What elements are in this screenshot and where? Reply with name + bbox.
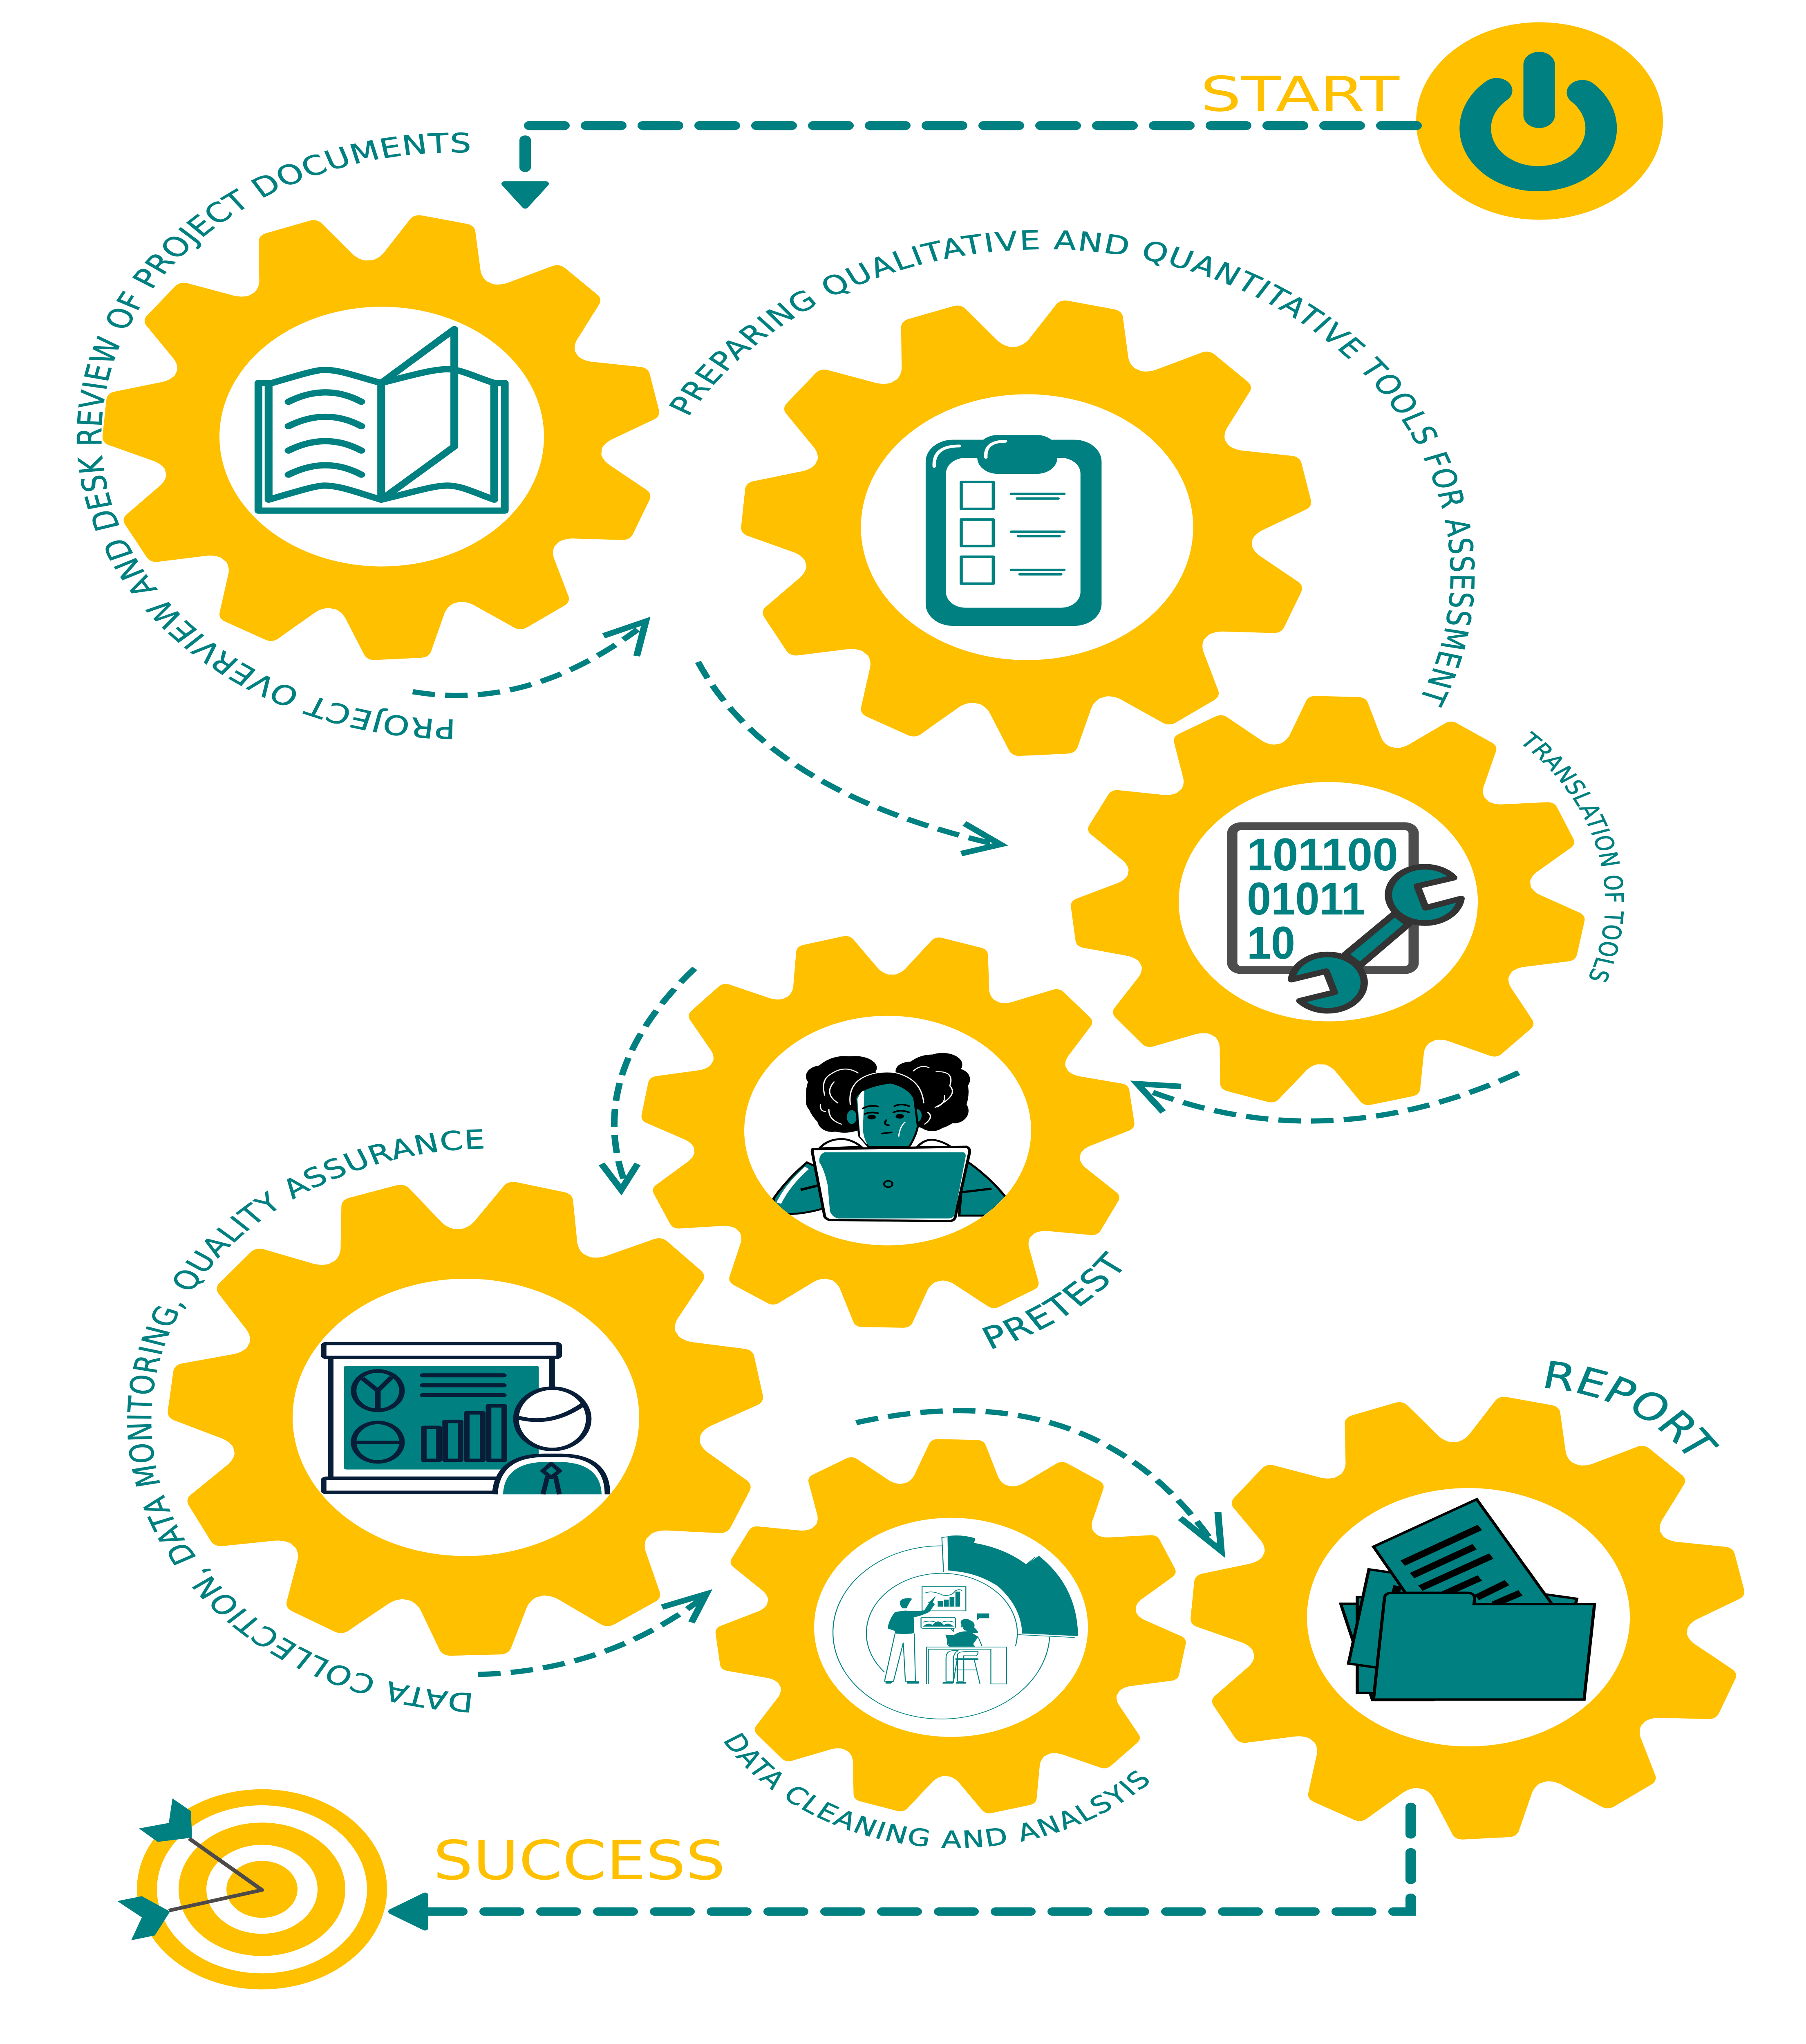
heading: start: START	[1200, 67, 1400, 122]
left arm	[774, 1163, 826, 1217]
label: data cleaning and analysis: DATA CLEANING AND ANALSYIS	[716, 1729, 1157, 1853]
heading: success: SUCCESS	[433, 1829, 725, 1892]
arrow: gear 2 to gear 3	[698, 662, 1000, 854]
gear 5	[96, 1126, 834, 1714]
label: report: REPORT	[1539, 1353, 1727, 1467]
icon: binary code sheet and wrench: 01011	[1247, 873, 1365, 925]
icon: power symbol	[1475, 65, 1601, 179]
gear 4	[573, 882, 1201, 1383]
icon: open book	[258, 329, 505, 511]
gear 3	[1057, 689, 1599, 1118]
arrow: gear 3 to gear 4	[1137, 1073, 1519, 1121]
laptop	[812, 1147, 970, 1221]
panel: step 2 preparing tools	[662, 225, 1481, 807]
icon: binary code sheet and wrench: 101100	[1247, 829, 1398, 881]
icon: person with laptop	[774, 1053, 1006, 1221]
icon: binary code sheet and wrench	[1232, 826, 1461, 1011]
start circle	[1416, 22, 1663, 220]
panel: step 3 translation	[1057, 689, 1629, 1118]
icon: target with arrows	[117, 1789, 387, 1989]
icon: analysts with dashboard ring	[833, 1535, 1078, 1719]
label: data collection: DATA COLLECTION, DATA MONITORING, QUALITY ASSURANCE	[121, 1125, 486, 1717]
panel: start	[1200, 22, 1663, 220]
panel: step 5 data collection	[96, 1125, 834, 1717]
gear 2	[678, 253, 1375, 807]
shoulders	[819, 1139, 861, 1148]
label: translation of tools: TRANSLATION OF TOOLS	[1514, 728, 1629, 985]
arrow: gear 6 to gear 7	[856, 1411, 1221, 1551]
panel: step 4 pretest	[642, 936, 1135, 1349]
face	[855, 1083, 918, 1147]
icon: clipboard checklist	[926, 435, 1101, 626]
label: preparing tools: PREPARING QUALITATIVE AND QUANTITATIVE TOOLS FOR ASSESSMENT	[662, 225, 1481, 709]
icon: binary code sheet and wrench: 10	[1247, 917, 1295, 969]
arrow: gear 4 to gear 5	[602, 968, 695, 1190]
label: pretest: PRETEST	[976, 1247, 1135, 1356]
icon: folder with documents	[1341, 1499, 1595, 1700]
ears	[846, 1109, 857, 1125]
arrow: gear 5 to gear 6	[478, 1594, 706, 1674]
arrow: start to first gear	[505, 126, 1416, 206]
panel: step 7 report	[1130, 1351, 1805, 1888]
panel: step 1 project overview	[41, 128, 721, 744]
gear 7	[1130, 1351, 1805, 1888]
arrow: gear 1 to gear 2	[413, 621, 646, 695]
gear 1	[41, 168, 721, 709]
arrow: report to success	[392, 1807, 1411, 1928]
label: project overview: PROJECT OVERVIEW AND DESK REVIEW OF PROJECT DOCUMENTS	[70, 128, 472, 744]
gear 6	[705, 1434, 1197, 1824]
icon: presenter with chart board	[324, 1343, 607, 1494]
right arm	[959, 1163, 1006, 1216]
panel: step 6 data cleaning	[705, 1434, 1197, 1853]
